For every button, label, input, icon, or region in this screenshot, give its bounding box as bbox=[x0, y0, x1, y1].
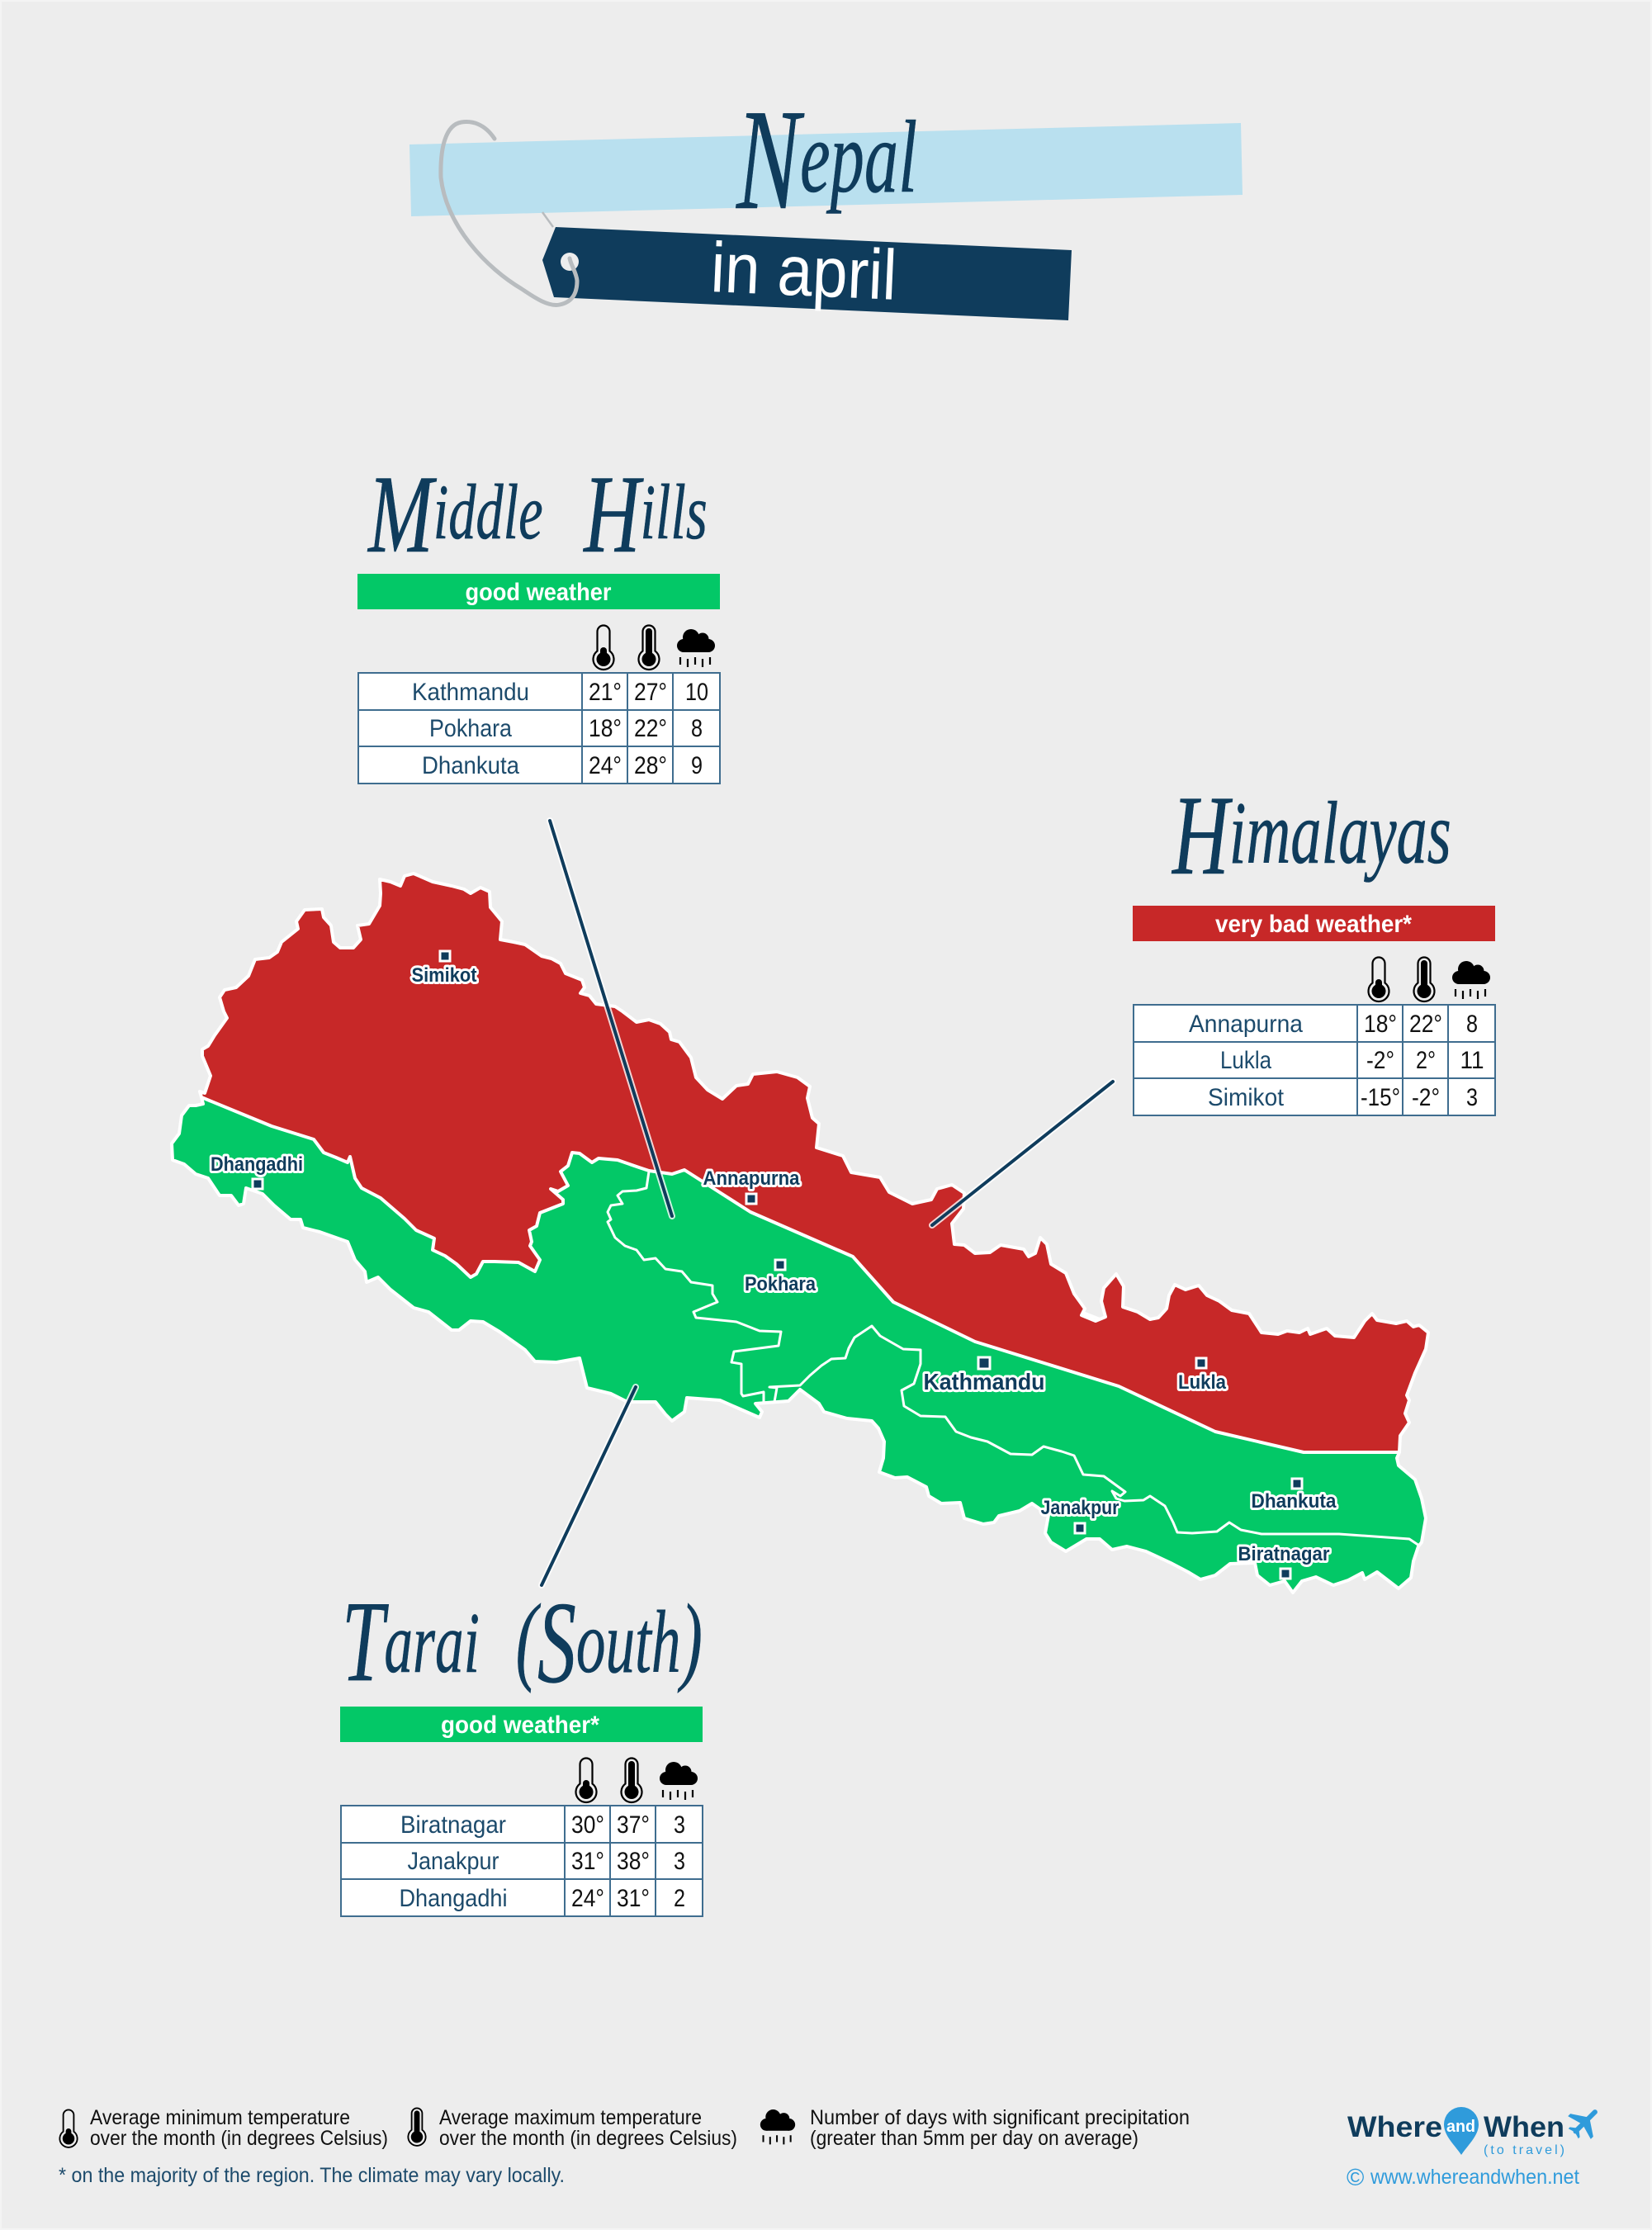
pointer line: Himalayas bbox=[932, 1082, 1113, 1225]
title: Nepal: epal bbox=[800, 100, 917, 214]
Himalayas region: red bbox=[200, 874, 1428, 1452]
title: Nepal: N bbox=[735, 80, 805, 240]
copyright mark: © bbox=[1347, 2165, 1364, 2191]
city: Dhangadhi: Dhangadhi bbox=[211, 1153, 303, 1176]
table: Tarai climate: Dhangadhi bbox=[400, 1885, 507, 1912]
footnote: * on the majority of the region. The climate may vary locally. bbox=[59, 2164, 565, 2187]
table: Himalayas climate: 18° bbox=[1364, 1011, 1397, 1038]
panel: Middle Hills bbox=[357, 453, 720, 784]
legend text: maximum temperature: over the month (in degrees Celsius) bbox=[439, 2127, 737, 2150]
tag string loop bbox=[441, 122, 577, 305]
legend text: rainy days: (greater than 5mm per day on average) bbox=[810, 2127, 1138, 2150]
heading: Himalayas: H bbox=[1171, 772, 1233, 898]
icon: maximum temperature bbox=[639, 626, 659, 670]
table: Tarai climate bbox=[341, 1806, 703, 1916]
heading: Middle Hills bbox=[367, 453, 708, 576]
table: Himalayas climate: 3 bbox=[1466, 1084, 1478, 1111]
status banner: good weather bbox=[340, 1707, 703, 1742]
legend text: rainy days bbox=[810, 2106, 1190, 2150]
table: Tarai climate: 38° bbox=[617, 1848, 650, 1875]
logo pin bbox=[1444, 2107, 1479, 2155]
icon: rainy days bbox=[677, 629, 715, 667]
heading: Middle Hills: ills bbox=[640, 468, 708, 556]
table: Himalayas climate: -2° bbox=[1412, 1084, 1440, 1111]
table: Middle Hills climate: 9 bbox=[691, 752, 703, 779]
pointer line: Tarai bbox=[542, 1387, 636, 1585]
city: Annapurna: Annapurna bbox=[703, 1167, 800, 1190]
city: Lukla bbox=[1178, 1358, 1227, 1394]
icon: minimum temperature bbox=[593, 626, 614, 670]
table: Middle Hills climate: 8 bbox=[691, 715, 703, 742]
website: www.whereandwhen.net bbox=[1370, 2166, 1579, 2189]
table: Middle Hills climate: Kathmandu bbox=[412, 679, 529, 706]
table: Himalayas climate: Annapurna bbox=[1189, 1011, 1303, 1038]
status banner: good weather bbox=[357, 574, 720, 609]
city: Biratnagar bbox=[1238, 1543, 1329, 1579]
icon: maximum temperature bbox=[621, 1759, 642, 1802]
table: Tarai climate: 2 bbox=[674, 1885, 685, 1912]
logo word: and: and bbox=[1446, 2118, 1475, 2136]
table: Himalayas climate: Lukla bbox=[1220, 1047, 1271, 1074]
table: Middle Hills climate bbox=[358, 673, 720, 784]
icon: minimum temperature bbox=[576, 1759, 596, 1802]
southern regions: green bbox=[172, 1073, 1426, 1593]
table: Tarai climate: 24° bbox=[571, 1885, 604, 1912]
heading: Himalayas bbox=[1171, 772, 1451, 898]
table: Himalayas climate: -2° bbox=[1366, 1047, 1394, 1074]
city: Simikot bbox=[411, 951, 477, 987]
table: Tarai climate: 31° bbox=[571, 1848, 604, 1875]
city: Simikot: Simikot bbox=[411, 964, 477, 987]
heading: Tarai (South): ) bbox=[678, 1584, 703, 1693]
logo: Where and When bbox=[1347, 2099, 1608, 2191]
heading: Tarai (South) bbox=[342, 1577, 703, 1708]
heading: Tarai (South): arai bbox=[384, 1596, 494, 1692]
table: Himalayas climate: 11 bbox=[1460, 1047, 1484, 1074]
icon: minimum temperature bbox=[1369, 958, 1389, 1001]
title block bbox=[409, 80, 1243, 320]
city: Pokhara: Pokhara bbox=[745, 1273, 817, 1295]
icon: rainy days bbox=[1452, 961, 1490, 999]
status banner: very bad weather: very bad weather* bbox=[1215, 911, 1412, 938]
tag cord behind band bbox=[542, 212, 553, 227]
legend text: maximum temperature bbox=[439, 2106, 737, 2150]
map of Nepal bbox=[172, 874, 1428, 1593]
city: Janakpur: Janakpur bbox=[1040, 1497, 1119, 1519]
river boundary west bbox=[608, 1172, 781, 1402]
city: Dhankuta: Dhankuta bbox=[1252, 1490, 1337, 1513]
table: Middle Hills climate: 21° bbox=[589, 679, 622, 706]
legend bbox=[59, 2106, 1190, 2187]
table: Middle Hills climate: Pokhara bbox=[429, 715, 512, 742]
city: Pokhara bbox=[745, 1260, 817, 1295]
luggage tag bbox=[542, 227, 1072, 320]
table: Tarai climate: 30° bbox=[571, 1811, 604, 1839]
city: Annapurna bbox=[703, 1167, 800, 1204]
city: Biratnagar: Biratnagar bbox=[1238, 1543, 1329, 1565]
heading: Tarai (South): S bbox=[537, 1579, 576, 1708]
logo word: When: When bbox=[1484, 2111, 1564, 2143]
table: Himalayas climate: -15° bbox=[1361, 1084, 1400, 1111]
title: Nepal bbox=[735, 80, 917, 240]
table: Tarai climate: 3 bbox=[674, 1811, 685, 1839]
icon: plane bbox=[1562, 2099, 1608, 2145]
table: Middle Hills climate: 10 bbox=[685, 679, 708, 706]
panel: Tarai (South) bbox=[340, 1577, 703, 1916]
table: Middle Hills climate: 28° bbox=[634, 752, 667, 779]
city: Janakpur bbox=[1040, 1497, 1119, 1533]
heading: Himalayas: imalayas bbox=[1229, 784, 1451, 883]
table: Middle Hills climate: 24° bbox=[589, 752, 622, 779]
icon: maximum temperature bbox=[1413, 958, 1435, 1001]
legend text: minimum temperature bbox=[90, 2106, 388, 2150]
city: Kathmandu bbox=[923, 1357, 1045, 1394]
pointer line: Middle Hills bbox=[550, 821, 672, 1216]
legend text: minimum temperature: over the month (in degrees Celsius) bbox=[90, 2127, 388, 2150]
table: Tarai climate: Biratnagar bbox=[400, 1811, 506, 1839]
heading: Tarai (South): outh bbox=[576, 1592, 681, 1692]
table: Middle Hills climate: Dhankuta bbox=[422, 752, 519, 779]
table: Himalayas climate bbox=[1134, 1005, 1495, 1115]
icon: rainy days bbox=[660, 1762, 698, 1800]
title band bbox=[409, 123, 1243, 216]
heading: Tarai (South): T bbox=[342, 1577, 389, 1706]
heading: Middle Hills: M bbox=[367, 453, 438, 576]
city: Dhankuta bbox=[1252, 1479, 1337, 1513]
logo tagline: (to travel) bbox=[1484, 2143, 1564, 2157]
table: Tarai climate: 37° bbox=[617, 1811, 650, 1839]
river boundary east bbox=[769, 1326, 1419, 1546]
logo word: Where: Where bbox=[1347, 2111, 1442, 2143]
table: Himalayas climate: 8 bbox=[1466, 1011, 1478, 1038]
table: Himalayas climate: 2° bbox=[1416, 1047, 1436, 1074]
panel: Himalayas bbox=[1133, 772, 1495, 1115]
legend icon: maximum temperature bbox=[408, 2108, 426, 2146]
city: Kathmandu: Kathmandu bbox=[923, 1369, 1045, 1394]
status banner: very bad weather bbox=[1133, 906, 1495, 941]
table: Tarai climate: 3 bbox=[674, 1848, 685, 1875]
city: Dhangadhi bbox=[211, 1153, 303, 1189]
heading: Middle Hills: iddle bbox=[433, 468, 556, 556]
legend icon: minimum temperature bbox=[59, 2109, 78, 2147]
table: Middle Hills climate: 27° bbox=[634, 679, 667, 706]
table: Middle Hills climate: 22° bbox=[634, 715, 667, 742]
table: Himalayas climate: Simikot bbox=[1208, 1084, 1285, 1111]
tag hole bbox=[561, 253, 579, 271]
legend icon: rainy days bbox=[760, 2109, 795, 2144]
heading: Tarai (South): ( bbox=[516, 1584, 542, 1693]
table: Tarai climate: Janakpur bbox=[408, 1848, 499, 1875]
legend text: minimum temperature: Average minimum temperature bbox=[90, 2106, 350, 2129]
status banner: good weather: good weather bbox=[466, 579, 612, 606]
table: Middle Hills climate: 18° bbox=[589, 715, 622, 742]
city: Lukla: Lukla bbox=[1178, 1371, 1227, 1394]
heading: Middle Hills: H bbox=[583, 453, 644, 576]
legend text: rainy days: Number of days with significant precipitation bbox=[810, 2106, 1190, 2129]
table: Tarai climate: 31° bbox=[617, 1885, 650, 1912]
status banner: good weather: good weather* bbox=[441, 1712, 599, 1739]
table: Himalayas climate: 22° bbox=[1409, 1011, 1442, 1038]
legend text: maximum temperature: Average maximum temperature bbox=[439, 2106, 702, 2129]
tag title: in april: in april bbox=[709, 228, 898, 315]
